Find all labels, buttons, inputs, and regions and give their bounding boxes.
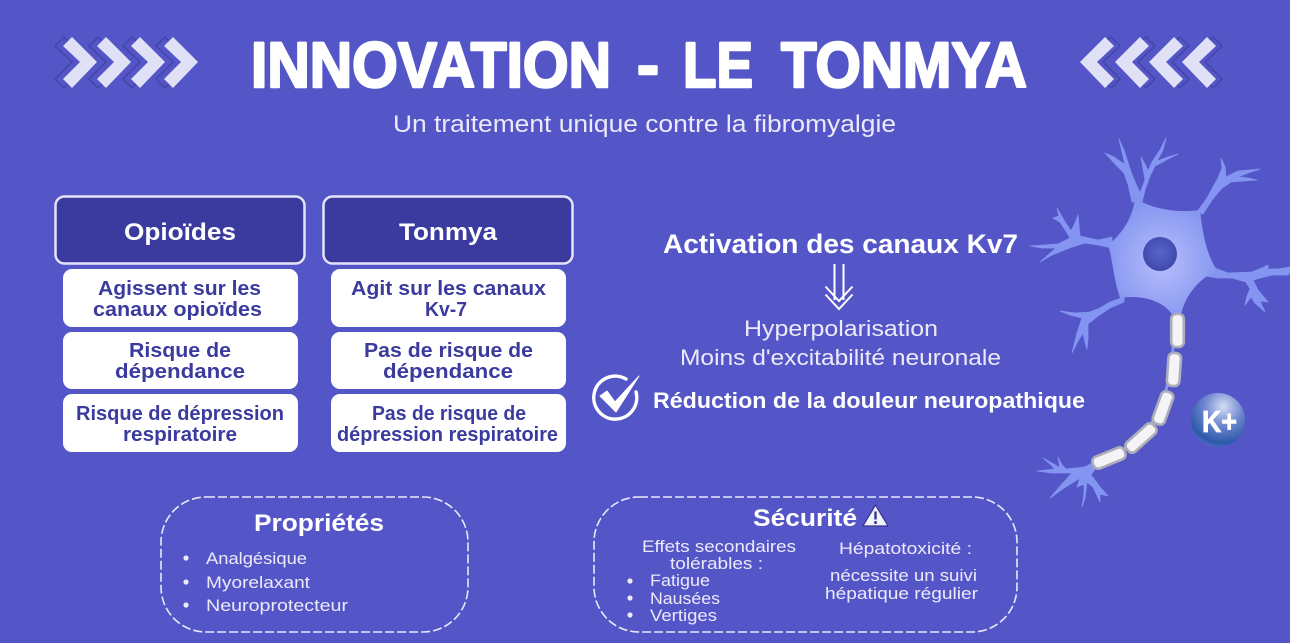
title: LE bbox=[683, 29, 753, 101]
card: mechanism: canaux opioïdes bbox=[93, 299, 262, 321]
card: no dependence risk: Pas de risque de bbox=[364, 340, 533, 362]
card: mechanism bbox=[63, 269, 298, 327]
card: no respiratory risk bbox=[331, 394, 566, 452]
card: no dependence risk bbox=[331, 332, 566, 389]
title: TONMYA bbox=[781, 29, 1027, 101]
card: dependence risk bbox=[63, 332, 298, 389]
text: hepatotoxicity bbox=[825, 539, 978, 603]
title: - bbox=[637, 29, 659, 101]
text: reduced neuronal excitability: Moins d'excitabilité neuronale bbox=[680, 345, 1001, 370]
panel: opioids column bbox=[56, 196, 304, 452]
text: tolerable side effects: Effets secondaires bbox=[642, 537, 796, 556]
icon: left chevrons bbox=[55, 37, 198, 88]
card: respiratory risk: Risque de dépression bbox=[76, 403, 284, 425]
heading: Opioïdes: Opioïdes bbox=[124, 219, 236, 246]
card: respiratory risk: respiratoire bbox=[123, 424, 237, 446]
card: no respiratory risk: Pas de risque de bbox=[372, 403, 526, 425]
text: tolerable side effects: Vertiges bbox=[650, 606, 717, 625]
title: INNOVATION bbox=[251, 29, 611, 101]
panel: properties bbox=[161, 497, 468, 632]
text: hyperpolarisation: Hyperpolarisation bbox=[744, 316, 938, 341]
text: tolerable side effects: tolérables : bbox=[670, 554, 763, 573]
text: neuropathic pain reduction: Réduction de la douleur neuropathique bbox=[653, 388, 1085, 413]
icon: potassium ion bbox=[1191, 393, 1245, 447]
text: tolerable side effects bbox=[627, 537, 796, 625]
card: no dependence risk: dépendance bbox=[383, 361, 513, 383]
card: respiratory risk bbox=[63, 394, 298, 452]
card: dependence risk: dépendance bbox=[115, 361, 245, 383]
heading: Tonmya: Tonmya bbox=[399, 219, 498, 246]
list: properties: Analgésique bbox=[206, 549, 307, 568]
subtitle: Un traitement unique contre la fibromyalgie bbox=[393, 111, 896, 138]
list: properties bbox=[183, 549, 348, 615]
icon: potassium ion: K+ bbox=[1202, 404, 1237, 439]
icon: check mark bbox=[594, 376, 639, 419]
card: mechanism: Agit sur les canaux bbox=[351, 278, 546, 300]
panel: safety bbox=[594, 497, 1017, 632]
card: mechanism: Kv-7 bbox=[425, 299, 467, 321]
panel: Tonmya column bbox=[324, 196, 572, 452]
card: mechanism: Agissent sur les bbox=[98, 278, 261, 300]
text: tolerable side effects: Nausées bbox=[650, 589, 720, 608]
heading: Opioïdes bbox=[56, 196, 304, 264]
arrow: double down arrow bbox=[826, 264, 852, 309]
title bbox=[251, 29, 1027, 101]
heading: Propriétés: Propriétés bbox=[254, 510, 384, 537]
card: dependence risk: Risque de bbox=[129, 340, 231, 362]
card: mechanism bbox=[331, 269, 566, 327]
card: no respiratory risk: dépression respiratoire bbox=[337, 424, 558, 446]
list: properties: Neuroprotecteur bbox=[206, 596, 348, 615]
list: properties: Myorelaxant bbox=[206, 573, 310, 592]
heading: Sécurité: Sécurité bbox=[753, 505, 857, 532]
icon: neuron bbox=[1030, 138, 1290, 507]
text: hepatotoxicity: nécessite un suivi bbox=[830, 566, 977, 585]
icon: warning triangle bbox=[863, 505, 888, 526]
text: hepatotoxicity: hépatique régulier bbox=[825, 584, 978, 603]
text: hepatotoxicity: Hépatotoxicité : bbox=[839, 539, 972, 558]
heading: Kv7 activation: Activation des canaux Kv7 bbox=[663, 229, 1018, 259]
icon: right chevrons bbox=[1080, 37, 1222, 88]
heading: Tonmya bbox=[324, 196, 572, 264]
text: tolerable side effects: Fatigue bbox=[650, 571, 710, 590]
